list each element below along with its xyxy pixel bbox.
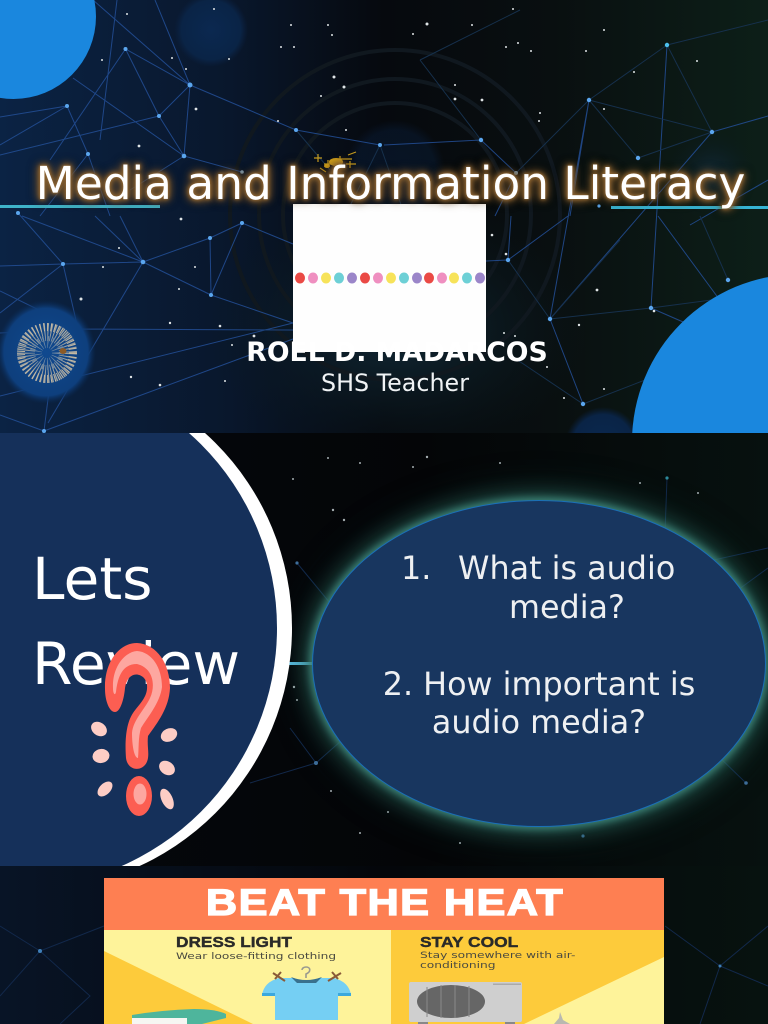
network background (0, 0, 768, 433)
accent line: right (611, 206, 768, 209)
decorative circle: top left (0, 0, 96, 99)
text: stay cool: conditioning (420, 960, 496, 970)
icon: book (132, 1009, 226, 1024)
slide 1: title slide (0, 0, 768, 433)
white image panel (293, 204, 486, 352)
slide 3: beat the heat (0, 866, 768, 1024)
title: Media and Information Literacy (36, 157, 745, 210)
heading: dress light: DRESS LIGHT (176, 934, 292, 951)
icon: shirt on hanger (262, 966, 351, 1020)
question 1: 1. (401, 550, 431, 587)
poster background shapes (104, 930, 664, 1024)
text: stay cool: Stay somewhere with air- (420, 951, 575, 961)
connector line (285, 662, 315, 665)
faint links (296, 10, 768, 404)
oval panel: review questions: audio media? (432, 704, 646, 741)
text: dress light: Wear loose-fitting clothing (176, 952, 336, 962)
question 2: 2. How important is (383, 666, 695, 702)
icon: question mark (91, 643, 178, 816)
heading: stay cool: STAY COOL (420, 934, 518, 951)
oval panel: review questions: What is audio (458, 550, 675, 587)
icon: grey shape (554, 1012, 570, 1024)
icon: air conditioner (409, 982, 522, 1024)
heading: lets review (32, 545, 240, 698)
bright links (0, 0, 768, 431)
oval panel: review questions: media? (509, 588, 625, 626)
text: stay cool (420, 951, 575, 970)
presenter name: ROEL D. MADARCOS (246, 337, 548, 368)
heading: lets review: Review (32, 630, 240, 698)
heading: lets review: Lets (32, 545, 153, 613)
decorative circle: bottom right (632, 274, 768, 610)
poster: beat the heat (104, 878, 664, 1024)
big circle panel (0, 366, 292, 890)
poster heading: BEAT THE HEAT (206, 882, 564, 923)
dotted colour strip (295, 272, 485, 284)
poster banner (104, 878, 664, 930)
presenter role: SHS Teacher (321, 369, 469, 397)
slide 2: lets review (0, 433, 768, 866)
network background (250, 433, 768, 866)
oval panel: review questions (312, 500, 766, 827)
icon: gold sparkle (314, 152, 356, 172)
icon: firework orb (0, 302, 94, 402)
accent line: left (0, 205, 160, 208)
network background (0, 866, 768, 1024)
